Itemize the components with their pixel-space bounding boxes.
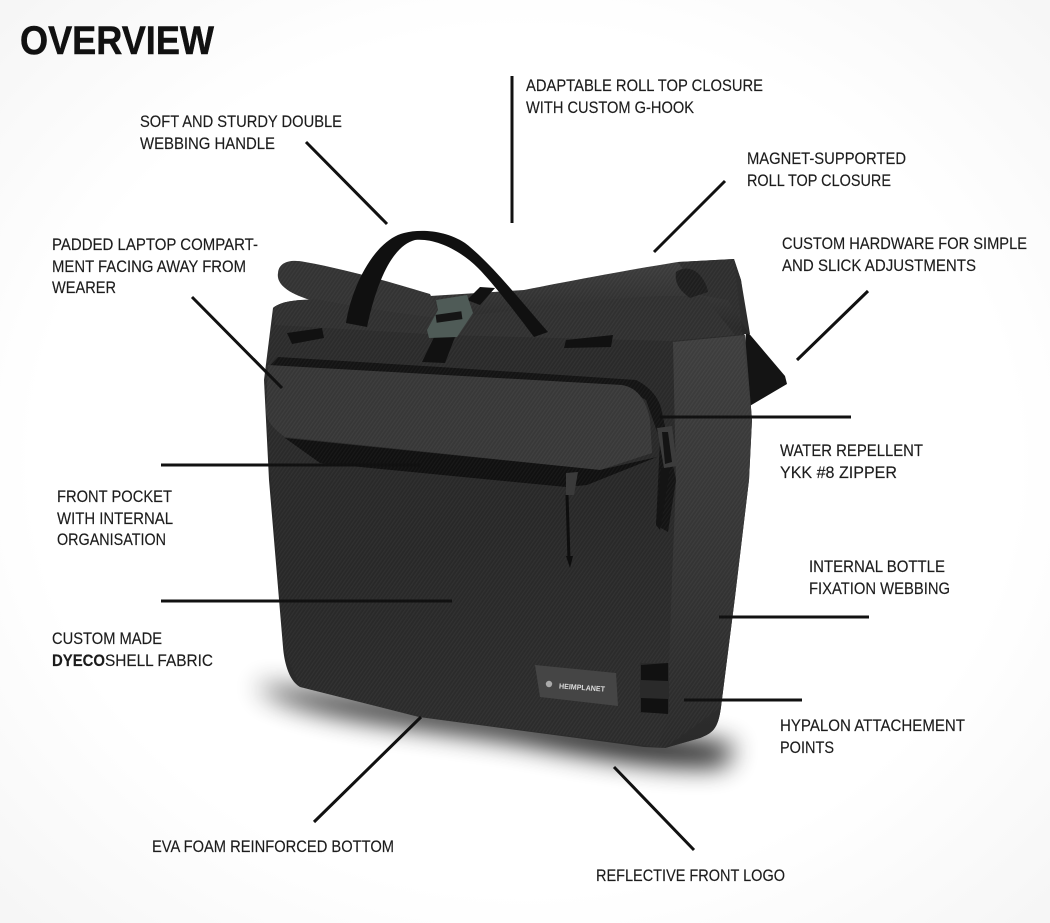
label: EVA foam: EVA FOAM REINFORCED BOTTOM bbox=[152, 838, 394, 856]
label: front pocket: WITH INTERNAL bbox=[57, 510, 173, 528]
label: hypalon: POINTS bbox=[780, 739, 834, 757]
webbing handle bbox=[346, 231, 548, 337]
g-hook buckle bbox=[427, 295, 473, 338]
bag body front bbox=[264, 300, 752, 748]
hypalon attachment points bbox=[640, 663, 669, 714]
back roll flap bbox=[430, 259, 750, 338]
label: laptop compartment: MENT FACING AWAY FROM bbox=[52, 258, 246, 276]
label: front pocket bbox=[57, 488, 173, 549]
label: hypalon: HYPALON ATTACHEMENT bbox=[780, 717, 965, 735]
side zipper pull bbox=[657, 426, 677, 468]
label: roll top closure: WITH CUSTOM G-HOOK bbox=[526, 99, 694, 117]
label: laptop compartment bbox=[52, 236, 258, 297]
label: fabric: SHELL FABRIC bbox=[105, 652, 213, 670]
label: fabric: CUSTOM MADE bbox=[52, 630, 162, 648]
label: reflective logo: REFLECTIVE FRONT LOGO bbox=[596, 867, 785, 885]
upper fold of roll top right bbox=[678, 259, 748, 332]
label: fabric bbox=[52, 630, 213, 670]
label: webbing handle: WEBBING HANDLE bbox=[140, 135, 275, 153]
side panel bbox=[658, 335, 752, 748]
label: magnet closure bbox=[747, 150, 906, 190]
label: laptop compartment: PADDED LAPTOP COMPART- bbox=[52, 236, 258, 254]
bag product illustration bbox=[255, 231, 787, 766]
zipper band bbox=[285, 438, 657, 487]
label: zipper: WATER REPELLENT bbox=[780, 442, 923, 460]
shoulder strap bbox=[743, 330, 787, 410]
label: front pocket: ORGANISATION bbox=[57, 531, 166, 549]
label: front pocket: FRONT POCKET bbox=[57, 488, 172, 506]
label: fabric: DYECO bbox=[52, 652, 105, 670]
label: webbing handle bbox=[140, 113, 342, 153]
label: custom hardware: AND SLICK ADJUSTMENTS bbox=[782, 257, 976, 275]
label: zipper bbox=[780, 442, 923, 482]
reflective logo patch bbox=[535, 665, 618, 706]
label: bottle webbing: INTERNAL BOTTLE bbox=[809, 558, 945, 576]
g-hook strap bbox=[422, 287, 495, 363]
label: bottle webbing bbox=[809, 558, 950, 598]
label: custom hardware bbox=[782, 235, 1027, 275]
label: roll top closure bbox=[526, 77, 763, 117]
front zipper pull and cord bbox=[566, 472, 578, 495]
title: OVERVIEW bbox=[20, 19, 214, 63]
weave texture bbox=[264, 259, 752, 748]
label: magnet closure: ROLL TOP CLOSURE bbox=[747, 172, 891, 190]
roll band bbox=[273, 296, 735, 341]
ground shadow bbox=[255, 685, 735, 766]
reflective logo patch: HEIMPLANET bbox=[559, 681, 606, 694]
label: bottle webbing: FIXATION WEBBING bbox=[809, 580, 950, 598]
label: laptop compartment: WEARER bbox=[52, 279, 116, 297]
black top zipper border bbox=[268, 357, 676, 532]
label: zipper: YKK #8 ZIPPER bbox=[780, 464, 897, 482]
label: roll top closure: ADAPTABLE ROLL TOP CLOSURE bbox=[526, 77, 763, 95]
left roll lobe bbox=[278, 261, 445, 325]
label: magnet closure: MAGNET-SUPPORTED bbox=[747, 150, 906, 168]
front flap pocket bbox=[266, 365, 652, 470]
label: webbing handle: SOFT AND STURDY DOUBLE bbox=[140, 113, 342, 131]
callout lines bbox=[161, 76, 869, 850]
top tabs bbox=[287, 328, 613, 348]
label: custom hardware: CUSTOM HARDWARE FOR SIMPLE bbox=[782, 235, 1027, 253]
label: hypalon bbox=[780, 717, 965, 757]
